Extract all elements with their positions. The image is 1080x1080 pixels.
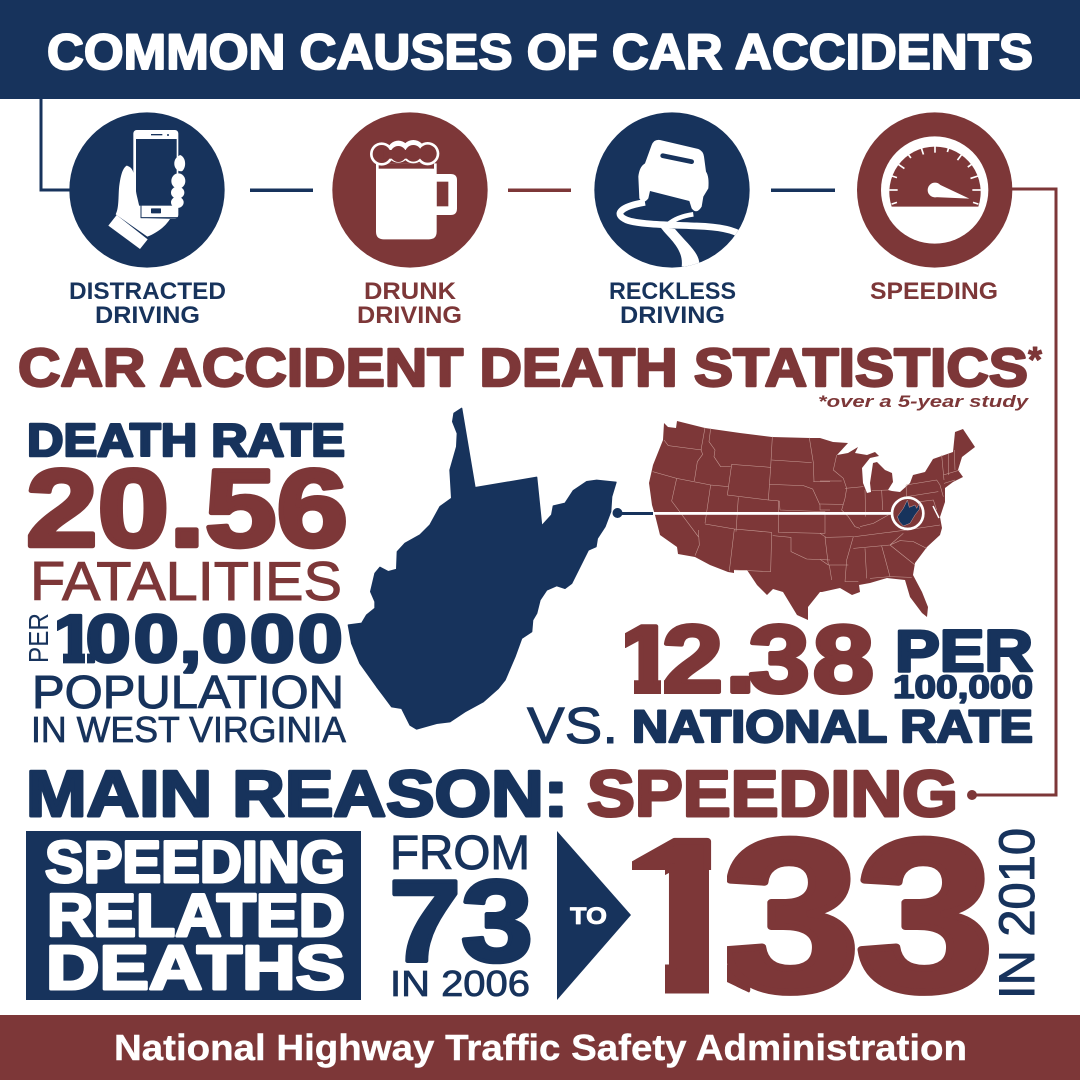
arrow: to: TO [570, 903, 607, 930]
label: drunk driving [357, 278, 462, 329]
panel: speeding related deaths [26, 830, 361, 1003]
icon: phone in hand [69, 112, 225, 268]
connector: reckless to speeding [771, 188, 835, 192]
100,000 small: 100,000 [893, 669, 1033, 705]
per: PER [895, 619, 1033, 684]
header banner [0, 0, 1080, 99]
source: National Highway Traffic Safety Administration [114, 1027, 967, 1068]
arrow: to [557, 831, 631, 1000]
state lines west [653, 428, 830, 572]
death rate label: DEATH RATE [27, 414, 345, 466]
white connecting line [654, 512, 891, 515]
icon: beer mug [332, 112, 488, 268]
footer banner [0, 1015, 1080, 1080]
stat: from 73 in 2006: IN 2006 [390, 963, 530, 1004]
label: speeding: SPEEDING [870, 278, 998, 305]
fatalities: FATALITIES [30, 550, 342, 612]
population: POPULATION [32, 666, 344, 718]
stat: from 73 in 2006: FROM [390, 827, 530, 880]
heading: main reason speeding: SPEEDING [587, 757, 958, 830]
stat: from 73 in 2006: 73 [389, 856, 533, 986]
highlight circle with West Virginia [892, 498, 923, 529]
title: COMMON CAUSES OF CAR ACCIDENTS [47, 24, 1033, 80]
stat block: West Virginia death rate [23, 414, 348, 750]
vertical per: PER [23, 613, 54, 663]
map: West Virginia silhouette [348, 408, 616, 729]
big number 12.38: 12.38 [615, 605, 874, 712]
label: reckless driving: DRIVING [620, 302, 725, 329]
label: drunk driving: DRIVING [357, 302, 462, 329]
connector: speeding to main reason [967, 189, 1056, 800]
stat: from 73 in 2006 [389, 827, 533, 1004]
panel: speeding related deaths: DEATHS [46, 934, 345, 1003]
footnote: over a 5-year study: *over a 5-year study [818, 393, 1029, 411]
connector: West Virginia to US map [612, 508, 653, 518]
state lines east [820, 450, 960, 582]
map: United States with West Virginia highlighted [649, 421, 975, 620]
in west virginia: IN WEST VIRGINIA [31, 709, 346, 750]
panel: speeding related deaths: RELATED [47, 882, 345, 949]
label: distracted driving [69, 278, 226, 329]
label: distracted driving: DISTRACTED [69, 278, 226, 305]
heading: main reason speeding [26, 757, 958, 830]
national rate: NATIONAL RATE [632, 701, 1033, 752]
stat block: national rate [526, 623, 1034, 744]
vs.: VS. [527, 697, 618, 754]
vertical label: in 2010: IN 2010 [989, 828, 1045, 999]
label: distracted driving: DRIVING [95, 302, 200, 329]
big number 133: 133 [615, 795, 994, 1036]
100,000: 100,000 [50, 600, 343, 676]
heading: main reason speeding: MAIN REASON: [26, 757, 568, 830]
panel: speeding related deaths: SPEEDING [45, 830, 345, 895]
label: reckless driving: RECKLESS [609, 278, 736, 305]
label: reckless driving [609, 278, 736, 329]
big number 20.56: 20.56 [26, 447, 348, 570]
icon: skidding car [594, 112, 750, 268]
label: drunk driving: DRUNK [364, 278, 457, 305]
icon: speedometer [857, 112, 1012, 268]
heading: car accident death statistics: * [1028, 339, 1042, 380]
heading: car accident death statistics: CAR ACCIDENT DEATH STATISTICS [18, 338, 1028, 398]
connector: distracted to drunk [250, 188, 313, 192]
connector: drunk to reckless [508, 188, 571, 192]
connector: header to distracted driving [41, 99, 72, 190]
